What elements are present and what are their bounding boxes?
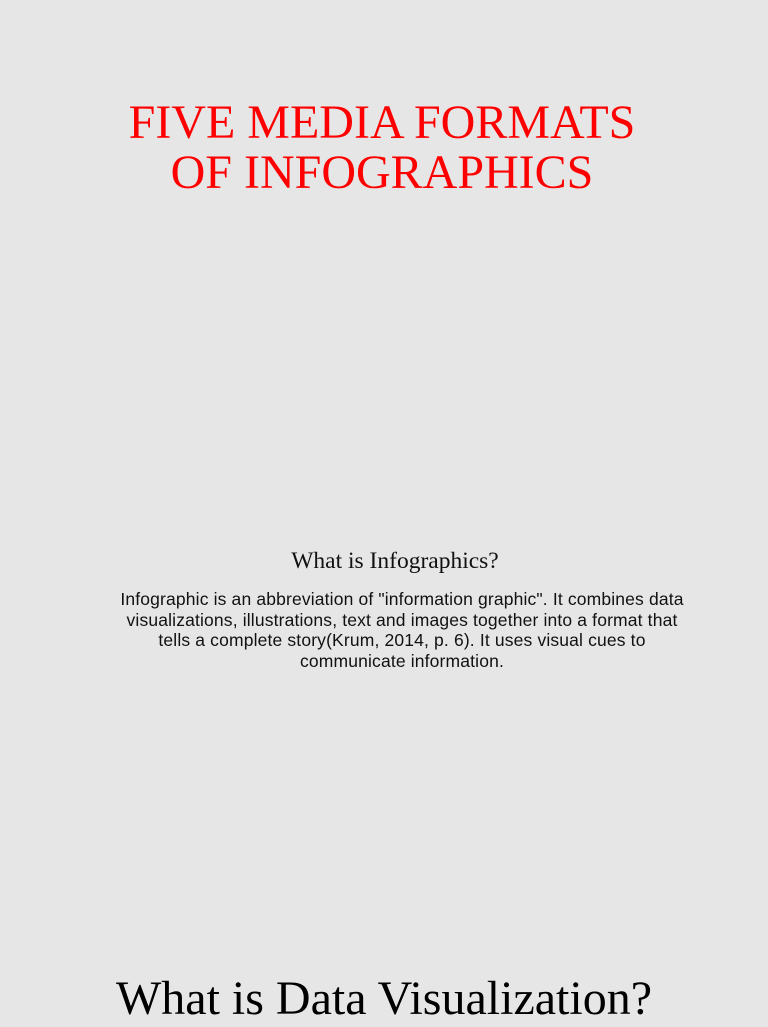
text block: definition: Infographic is an abbreviation of "information graphic". It combines data	[120, 589, 684, 609]
text block: definition	[120, 589, 684, 670]
text block: definition: visualizations, illustrations, text and images together into a format that	[127, 610, 677, 630]
heading: what is data visualization: What is Data Visualization?	[116, 972, 652, 1025]
text block: definition: communicate information.	[300, 650, 504, 670]
title	[129, 96, 635, 199]
text block: definition: tells a complete story(Krum, 2014, p. 6). It uses visual cues to	[158, 630, 646, 650]
heading: what is infographics: What is Infographics?	[291, 548, 499, 574]
title: FIVE MEDIA FORMATS	[129, 96, 635, 149]
title: OF INFOGRAPHICS	[171, 146, 593, 199]
